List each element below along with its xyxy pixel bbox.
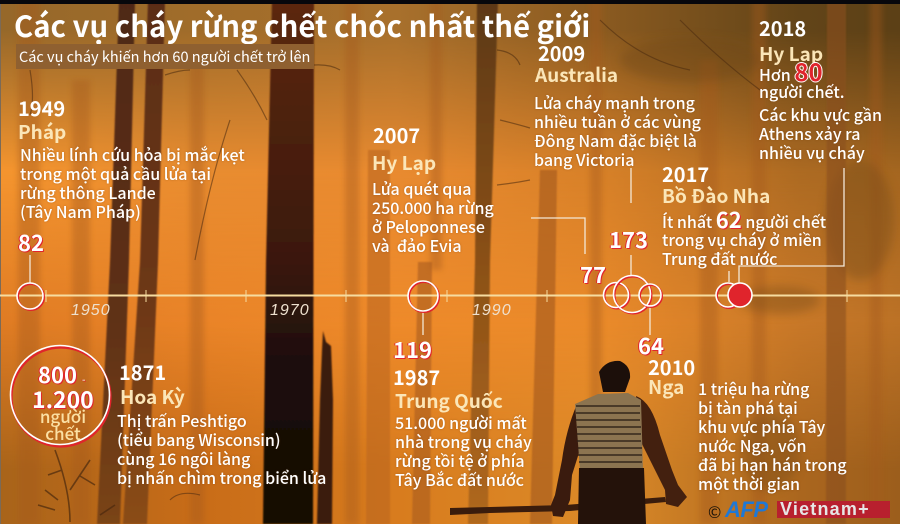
event: 2009 Australia: Australia (535, 61, 618, 88)
death toll: 1871: chết (45, 420, 81, 445)
event: 2017 Portugal (662, 159, 826, 270)
axis label 1950: 1950 (71, 302, 111, 319)
event: 1987 China (393, 362, 532, 491)
event: 2007 Greece: Lửa quét qua (372, 176, 472, 200)
event: 2007 Greece: 2007 (373, 120, 420, 149)
event: 1987 China: 1987 (393, 362, 440, 391)
circle: 1987 (408, 281, 439, 312)
AFP logo: AFP (725, 497, 768, 522)
event: 2010 Russia: 1 triệu ha rừng (698, 376, 809, 400)
circle: 1871 (10, 346, 110, 446)
event: 1949 France: rừng thông Lande (20, 180, 156, 204)
event: 2009 Australia: bang Victoria (534, 147, 635, 171)
number: 64: 64 (638, 329, 664, 361)
man silhouette (450, 361, 687, 524)
death toll: 1871 (32, 358, 94, 445)
number: 119: 119 (393, 333, 432, 365)
image edges (0, 0, 1, 524)
event: 1987 China: nhà trong vụ cháy (395, 429, 532, 453)
head (599, 361, 630, 392)
event: 1871 USA: bị nhấn chìm trong biển lửa (117, 465, 326, 489)
event: 2017 Portugal: Trung đất nước (662, 246, 777, 270)
foliage lower left (38, 450, 115, 522)
event: 2010 Russia: một thời gian (698, 471, 800, 495)
event: 1949 France: 1949 (18, 93, 65, 122)
number: 173: 173 (609, 223, 648, 255)
event: 1871 USA: Hoa Kỳ (120, 383, 185, 410)
timeline axis (0, 290, 900, 302)
event: 1987 China: rừng tồi tệ ở phía (395, 448, 525, 472)
event: 2018 Greece: 2018 (759, 13, 806, 42)
event: 2018 Greece: Hơn 80 (759, 53, 823, 88)
event: 1987 China: 51.000 người mất (395, 410, 527, 434)
shovel handle (450, 497, 666, 515)
axis label 1970: 1970 (270, 302, 310, 319)
event: 2007 Greece: ở Peloponnese (372, 214, 485, 238)
death toll: 1871: 1.200 (32, 381, 94, 415)
event: 2018 Greece (759, 13, 882, 164)
event: 1949 France: Pháp (18, 118, 66, 145)
event: 1871 USA: cùng 16 ngôi làng (117, 446, 250, 470)
event: 2018 Greece: nhiều vụ cháy (759, 140, 865, 164)
event: 2017 Portugal: trong vụ cháy ở miền (662, 227, 822, 251)
axis label 1990: 1990 (472, 302, 512, 319)
event: 2017 Portugal: Ít nhất 62 người chết (662, 203, 826, 235)
event: 1987 China: Trung Quốc (395, 387, 503, 414)
event: 2017 Portugal: Bồ Đào Nha (662, 182, 770, 209)
number: 77: 77 (580, 258, 606, 290)
shirt (575, 393, 643, 470)
event: 2010 Russia: 2010 (648, 352, 695, 381)
event: 1871 USA: 1871 (119, 357, 166, 386)
title: Các vụ cháy rừng chết chóc nhất thế giới (14, 4, 590, 46)
event: 2018 Greece: người chết. (759, 79, 845, 103)
event: 1949 France: Nhiều lính cứu hỏa bị mắc kẹt (20, 142, 245, 166)
event: 2007 Greece: và đảo Evia (372, 233, 462, 257)
event: 2010 Russia: bị tàn phá tại (698, 395, 798, 419)
event: 2018 Greece: Hy Lạp (759, 40, 823, 67)
event: 2018 Greece: Các khu vực gần (759, 102, 882, 126)
event: 2007 Greece: 250.000 ha rừng (372, 195, 494, 219)
event: 2009 Australia: 2009 (538, 38, 585, 67)
event: 1949 France (18, 93, 245, 258)
circle: 1949 (17, 283, 44, 310)
event: 2009 Australia: Đông Nam đặc biệt là (534, 128, 697, 152)
event: 2009 Australia: nhiều tuần ở các vùng (534, 109, 701, 133)
arms (551, 404, 583, 517)
event: 2018 Greece: Athens xảy ra (759, 121, 861, 145)
trousers (578, 468, 646, 524)
event: 1949 France: trong một quả cầu lửa tại (20, 161, 211, 185)
event: 1987 China: Tây Bắc đất nước (395, 467, 524, 491)
event: 2009 Australia (534, 38, 701, 171)
event: 1949 France: 82 (18, 226, 44, 258)
event: 2009 Australia: Lửa cháy mạnh trong (534, 90, 695, 114)
event: 2010 Russia: khu vực phía Tây (698, 414, 825, 438)
subtitle: Các vụ cháy khiến hơn 60 người chết trở lên (19, 46, 310, 67)
event: 1871 USA (117, 357, 326, 489)
death toll: 1871: người (40, 403, 86, 428)
event: 2010 Russia: đã bị hạn hán trong (698, 452, 847, 476)
event: 1871 USA: Thị trấn Peshtigo (117, 408, 247, 432)
event: 2017 Portugal: 2017 (662, 159, 709, 188)
event: 2007 Greece (372, 120, 494, 257)
event: 1949 France: (Tây Nam Pháp) (20, 199, 141, 223)
circles: 2007, 2009, 2010 (604, 276, 662, 314)
event: 2010 Russia (648, 352, 847, 495)
event: 2007 Greece: Hy Lạp (372, 149, 436, 176)
event: 2010 Russia: Nga (648, 373, 684, 400)
credits (708, 497, 890, 523)
death toll: 1871: 800 - (38, 358, 85, 390)
copyright: © (708, 499, 721, 523)
top bar (0, 0, 900, 4)
circles: 2017, 2018 (716, 283, 752, 308)
connector lines (30, 168, 844, 335)
event: 2010 Russia: nước Nga, vốn (698, 433, 807, 457)
event: 1871 USA: (tiểu bang Wisconsin) (117, 427, 281, 451)
